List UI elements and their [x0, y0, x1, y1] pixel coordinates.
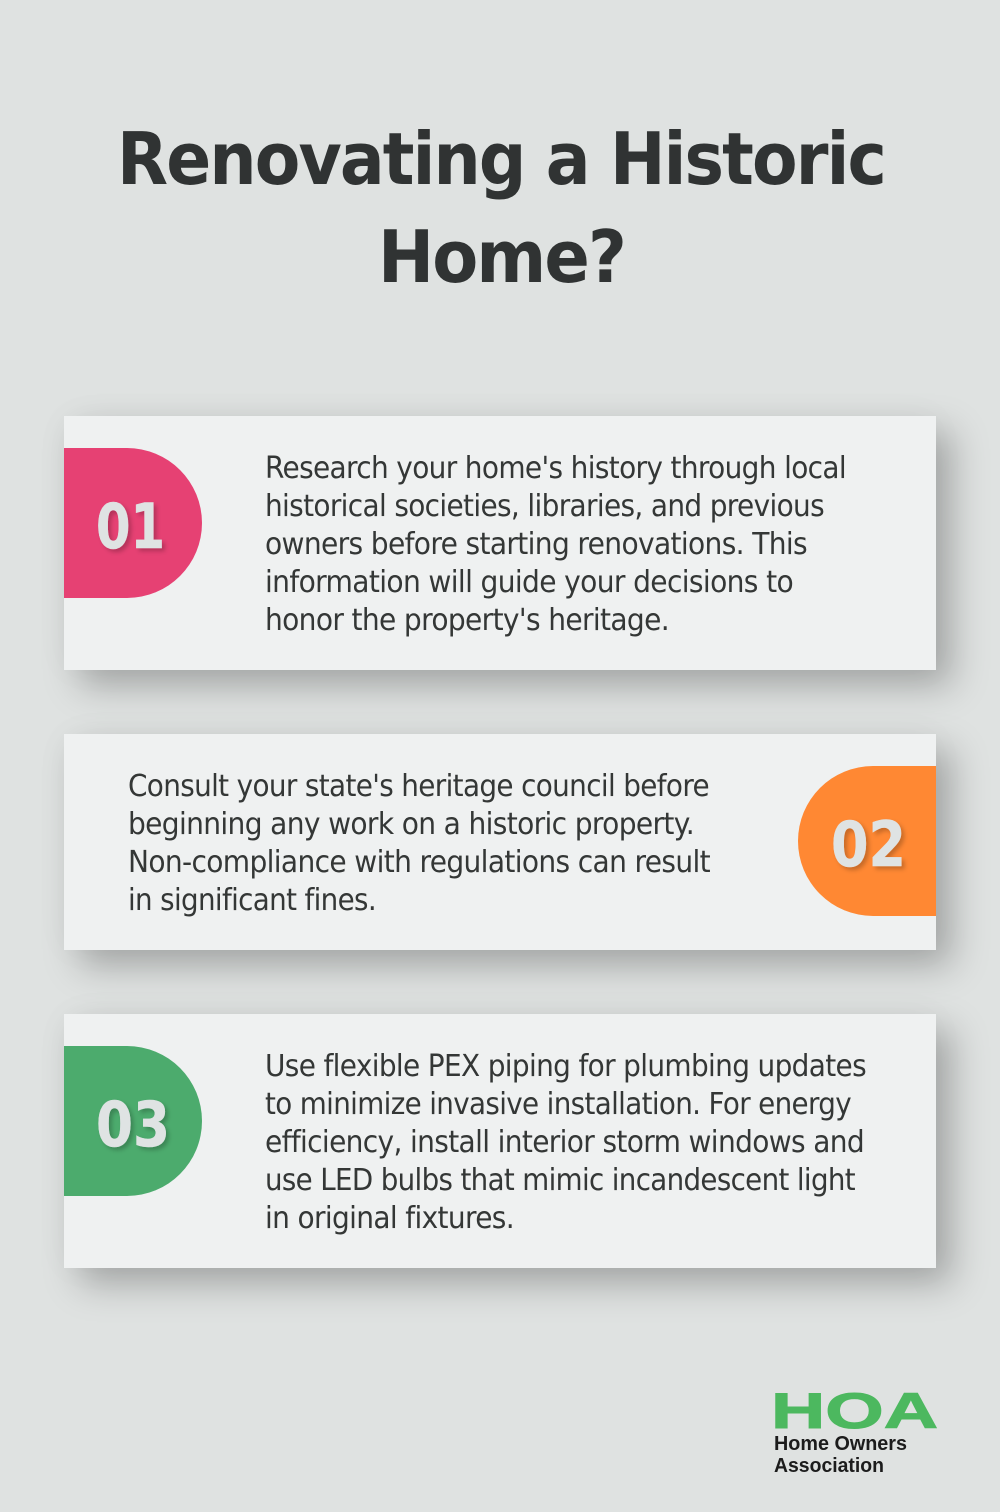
step 3 text: efficiency, install interior storm windows and [265, 1125, 864, 1160]
step 3 badge [64, 1046, 202, 1196]
logo: Home Owners Association [771, 1383, 938, 1477]
step 2 number: 02 [831, 808, 906, 881]
panel: step 3 card [64, 1014, 936, 1268]
step 1 text: Research your home's history through local [265, 451, 846, 486]
step 3 text: in original fixtures. [265, 1201, 514, 1236]
panel: step 2 card [64, 734, 936, 950]
logo: Home Owners Association: HOA [771, 1383, 938, 1439]
panel: step 1 card [64, 416, 936, 670]
step 1 badge [64, 448, 202, 598]
step 3 text: use LED bulbs that mimic incandescent light [265, 1163, 856, 1198]
step 1 text: honor the property's heritage. [265, 603, 669, 638]
logo: Home Owners Association: Association [774, 1455, 884, 1477]
step 3 text [265, 1049, 866, 1236]
step 1 text: owners before starting renovations. This [265, 527, 807, 562]
title [117, 117, 885, 299]
step 1 number: 01 [96, 490, 165, 563]
logo: Home Owners Association: Home Owners [774, 1433, 907, 1455]
step 2 text: beginning any work on a historic property. [128, 807, 694, 842]
title: Home? [378, 215, 625, 299]
step 2 text: in significant fines. [128, 883, 376, 918]
step 2 text: Non-compliance with regulations can result [128, 845, 711, 880]
step 3 number: 03 [96, 1088, 170, 1161]
step 2 text [128, 769, 711, 918]
step 3 text: Use flexible PEX piping for plumbing updates [265, 1049, 866, 1084]
step 2 text: Consult your state's heritage council before [128, 769, 709, 804]
step 1 text: information will guide your decisions to [265, 565, 793, 600]
step 3 text: to minimize invasive installation. For energy [265, 1087, 851, 1122]
step 2 badge [798, 766, 936, 916]
title: Renovating a Historic [117, 117, 885, 201]
step 1 text [265, 451, 846, 638]
step 1 text: historical societies, libraries, and previous [265, 489, 824, 524]
